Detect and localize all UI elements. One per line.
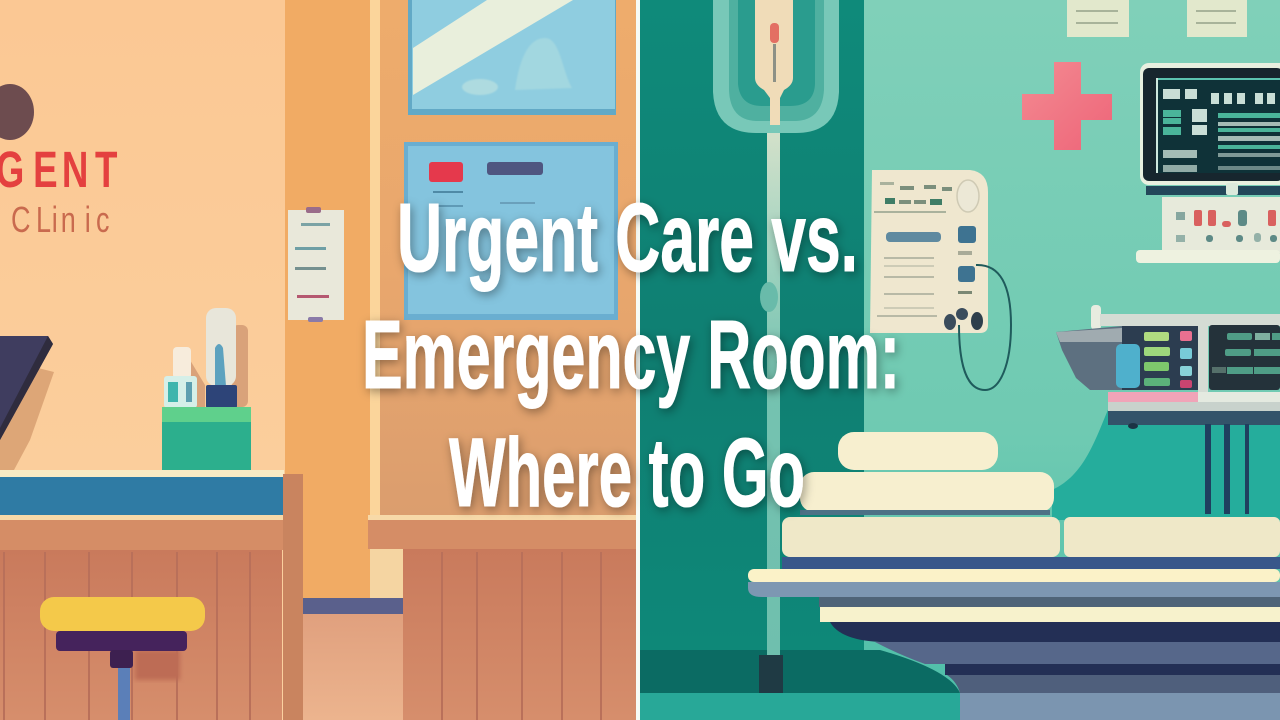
clinic sign: T <box>95 142 117 198</box>
clinic sign: N <box>62 142 88 198</box>
laptop <box>0 336 54 470</box>
clinic sign: C <box>11 199 31 240</box>
title <box>362 183 900 527</box>
wall info board <box>404 142 618 320</box>
supply bottles and bin <box>162 308 251 471</box>
floor and skirting <box>303 548 403 720</box>
clinic sign: n <box>61 199 76 240</box>
reception counter <box>0 470 303 720</box>
title: Urgent Care vs. <box>397 183 858 292</box>
clinic logo mark <box>0 84 34 140</box>
clinic sign: L <box>36 199 51 240</box>
floor shade <box>640 650 960 720</box>
clinic sign: c <box>96 199 110 240</box>
title: Where to Go <box>449 418 805 527</box>
bedside monitor <box>1056 305 1280 514</box>
clinic sign <box>0 142 117 240</box>
monitor <box>1140 63 1280 195</box>
hospital bed <box>748 432 1280 720</box>
wall paper notes <box>1067 0 1247 37</box>
wall poster <box>408 0 616 115</box>
clinic sign: i <box>85 199 91 240</box>
panel: urgent care clinic <box>0 0 636 720</box>
red cross <box>1022 62 1112 150</box>
second counter <box>368 515 636 720</box>
centre divider <box>636 0 640 720</box>
panel: emergency room <box>640 0 1280 720</box>
title: Emergency Room: <box>362 300 900 409</box>
orange wall column <box>285 0 370 600</box>
IV bag and pole <box>713 0 839 693</box>
device panel <box>1136 197 1280 263</box>
wall clipboard note <box>288 207 344 322</box>
lower wall shade <box>1052 400 1280 520</box>
clinic sign: i <box>52 199 58 240</box>
yellow stool <box>40 597 205 720</box>
clinic sign: E <box>33 142 58 198</box>
wall medical device <box>870 170 1011 390</box>
